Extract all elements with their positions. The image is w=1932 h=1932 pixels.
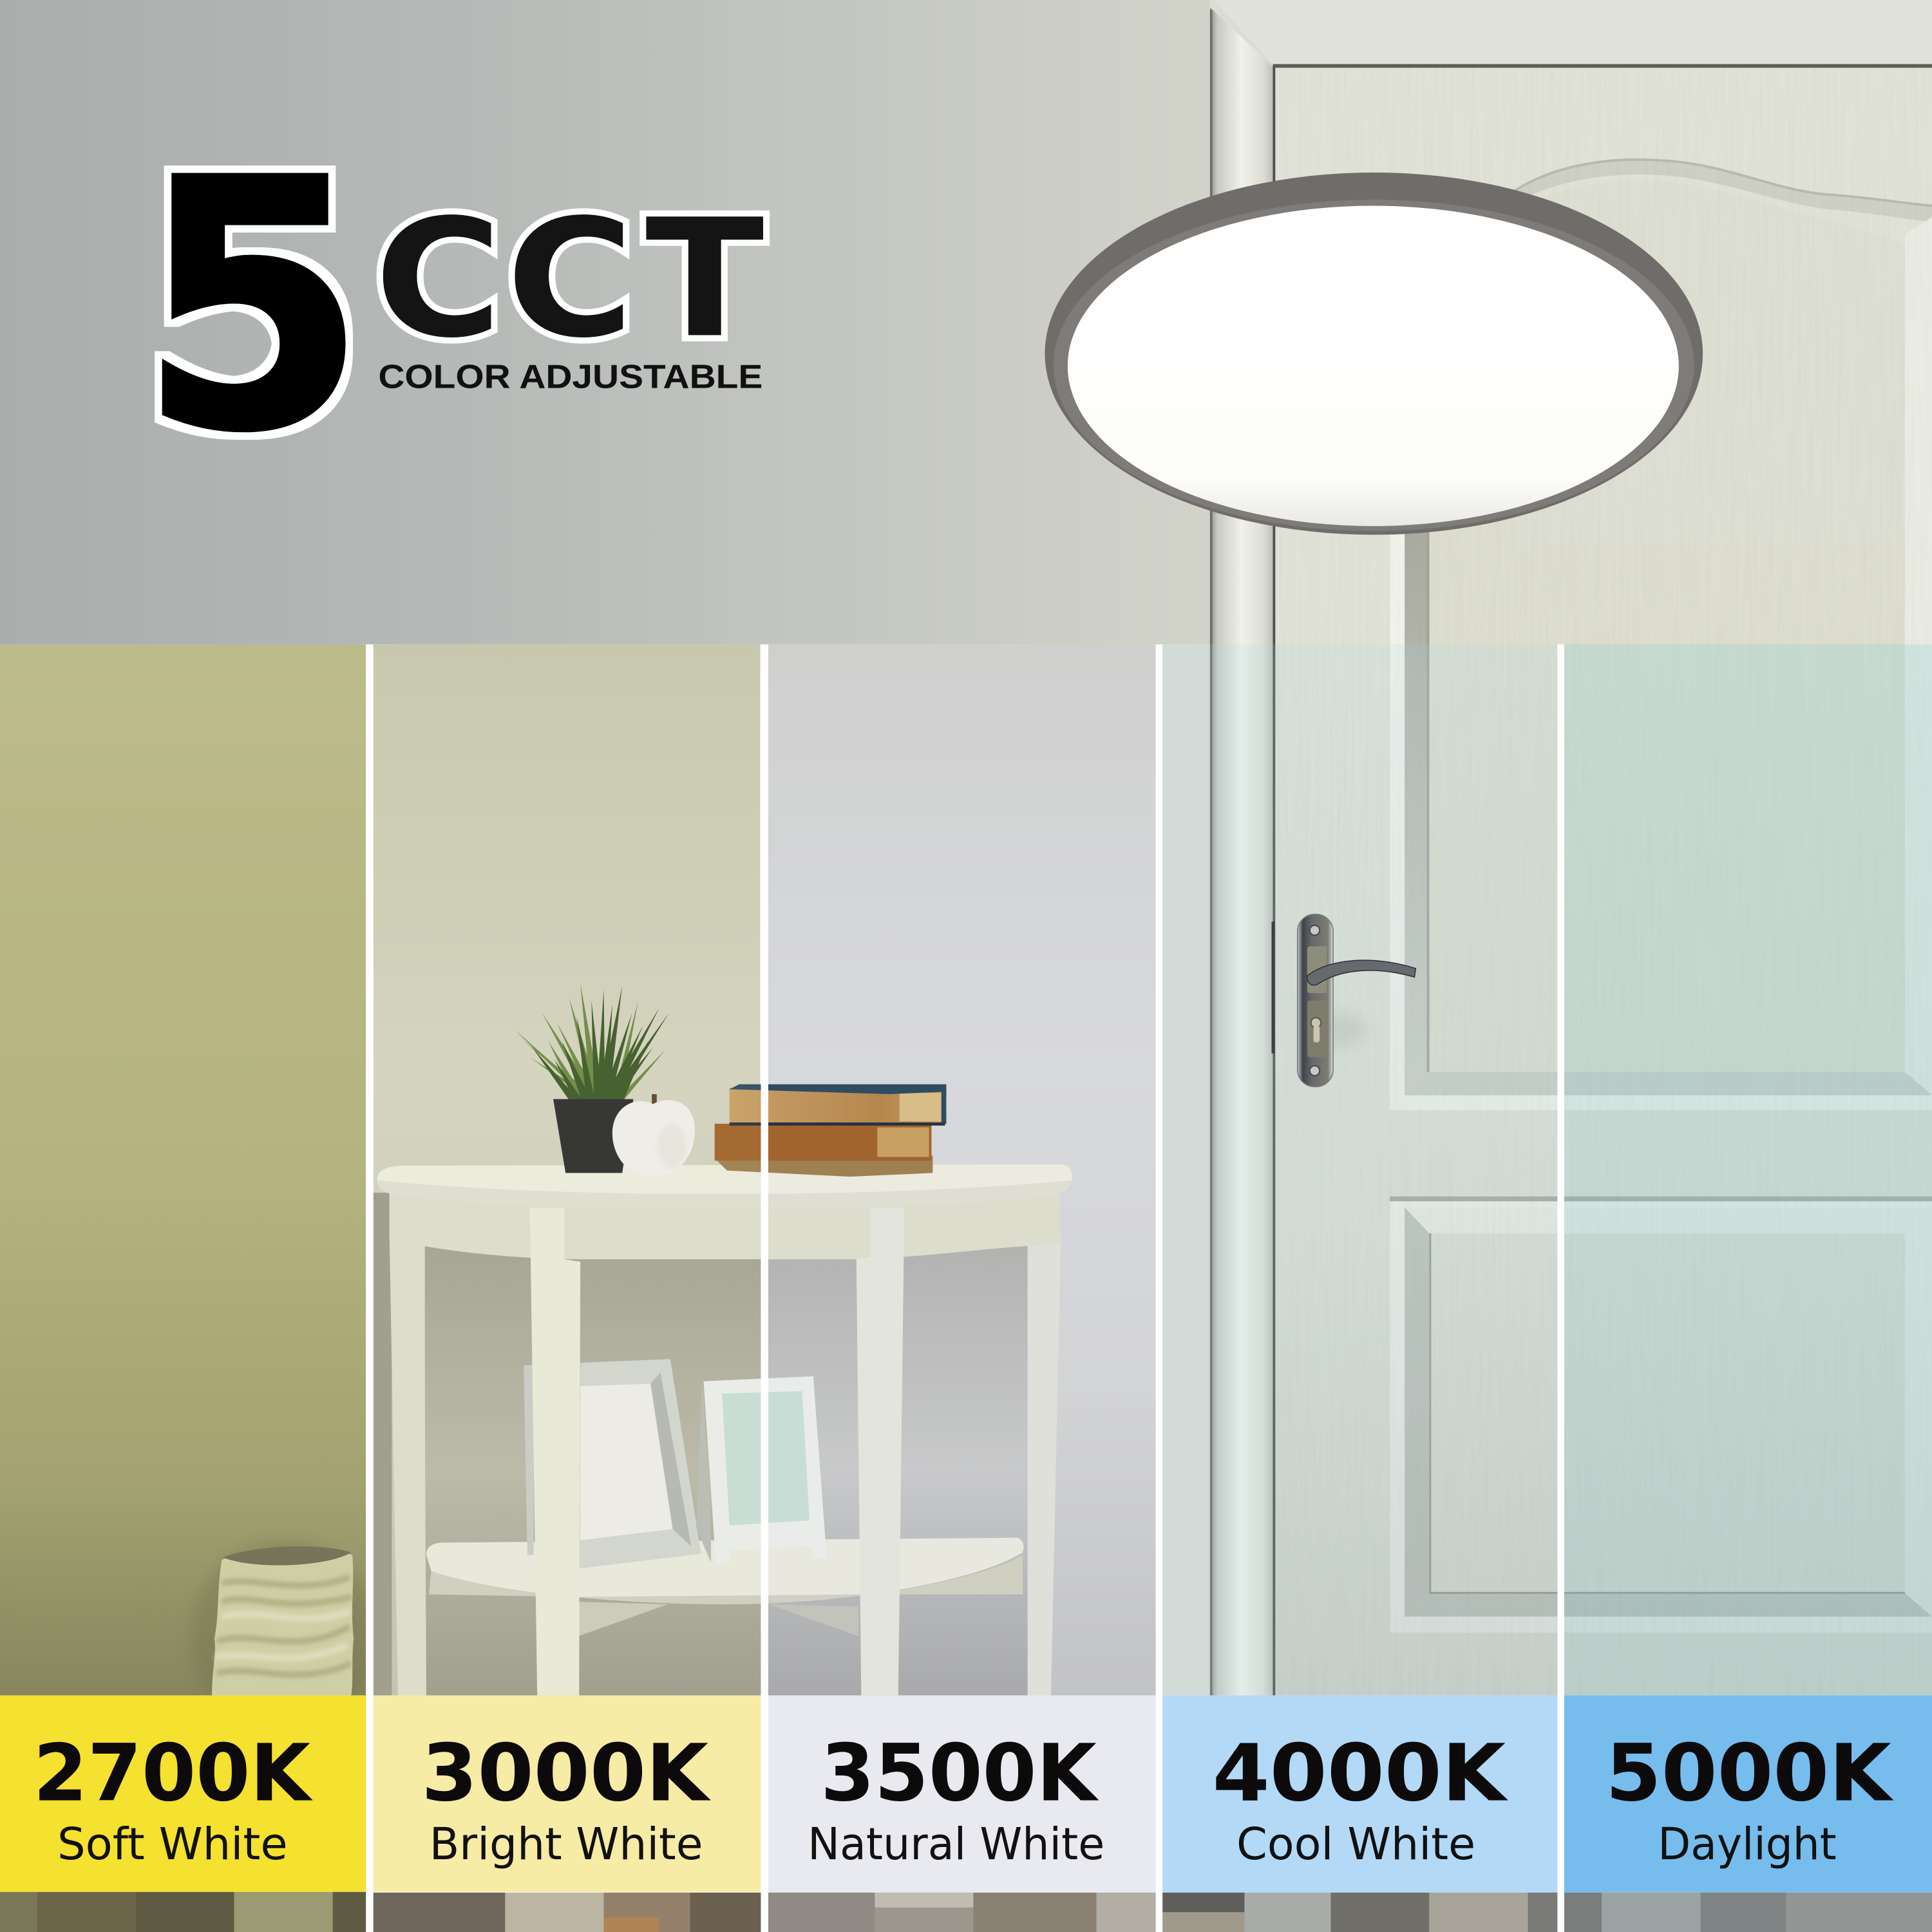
label bar: 2700K Soft White — [0, 1696, 366, 1892]
fixture outer ring — [1045, 173, 1703, 535]
headline: CCT: CCT — [374, 184, 765, 374]
console table — [374, 1164, 1072, 1696]
door casing left — [1210, 7, 1273, 1696]
door leaf — [1275, 68, 1932, 1696]
upper door panel with arched moulding — [1390, 160, 1932, 1110]
table shadow on wall, warm side — [425, 1244, 761, 1696]
label bar: 2700K Soft White: 2700K — [33, 1727, 313, 1819]
front left leg — [530, 1208, 580, 1696]
fixture inner bezel — [1054, 200, 1694, 531]
door handle — [1271, 914, 1416, 1087]
ceiling light fixture — [1045, 173, 1703, 535]
panel: 3500K wall strip — [768, 645, 1156, 1696]
table lower shelf — [426, 1538, 1023, 1636]
fixture lens — [1068, 206, 1679, 526]
subheading: color adjustable: COLOR ADJUSTABLE — [378, 358, 762, 395]
label bar: 4000K Cool White: Cool White — [1236, 1819, 1475, 1870]
back right leg — [1028, 1232, 1061, 1696]
label bar: 3500K Natural White: 3500K — [820, 1727, 1099, 1819]
label bar: 3000K Bright White: Bright White — [430, 1819, 703, 1870]
label bar: 4000K Cool White — [1162, 1696, 1557, 1893]
colour temperature tints — [374, 645, 1932, 1696]
panel: 3000K wall strip — [374, 645, 760, 1696]
apple ornament — [612, 1094, 695, 1177]
wall shadow left of table — [374, 1193, 392, 1696]
potted plant — [515, 983, 669, 1173]
label bar: 5000K Daylight: Daylight — [1658, 1819, 1837, 1870]
panel: 2700K wall strip — [0, 645, 376, 1738]
upper panel field — [1429, 493, 1905, 1072]
door grain texture — [1275, 68, 1932, 1696]
label bar: 2700K Soft White: Soft White — [57, 1819, 288, 1870]
door bottom shading — [1275, 641, 1932, 1696]
door casing top — [1214, 0, 1932, 64]
colour band separators — [366, 645, 1564, 1932]
door: frame, leaf and panels — [1210, 0, 1932, 1696]
back left leg — [390, 1232, 426, 1696]
books stack — [715, 1084, 946, 1177]
picture frame, glass — [696, 1376, 827, 1564]
wood floor strip — [0, 1892, 1932, 1932]
label bar: 4000K Cool White: 4000K — [1213, 1727, 1508, 1819]
table apron — [390, 1193, 1059, 1259]
label bar: 3500K Natural White — [768, 1696, 1156, 1893]
panel: 4000K wall sliver — [1162, 645, 1211, 1696]
vase — [194, 1540, 366, 1695]
picture frame, silver — [524, 1359, 701, 1569]
door middle rail — [1390, 1110, 1932, 1197]
table shadow on wall, cool side — [768, 1244, 1028, 1696]
headline: 5: 5 — [139, 108, 366, 506]
label bar: 5000K Daylight — [1564, 1696, 1932, 1893]
background: wall photo upper band — [0, 0, 1210, 645]
label bar: 5000K Daylight: 5000K — [1605, 1727, 1894, 1819]
table top — [377, 1164, 1072, 1209]
label bar: 3000K Bright White: 3000K — [421, 1727, 711, 1819]
label bar: 3500K Natural White: Natural White — [808, 1819, 1104, 1870]
label bar: 3000K Bright White — [374, 1696, 761, 1892]
front right leg — [857, 1208, 904, 1696]
lower door panel — [1390, 1197, 1932, 1633]
